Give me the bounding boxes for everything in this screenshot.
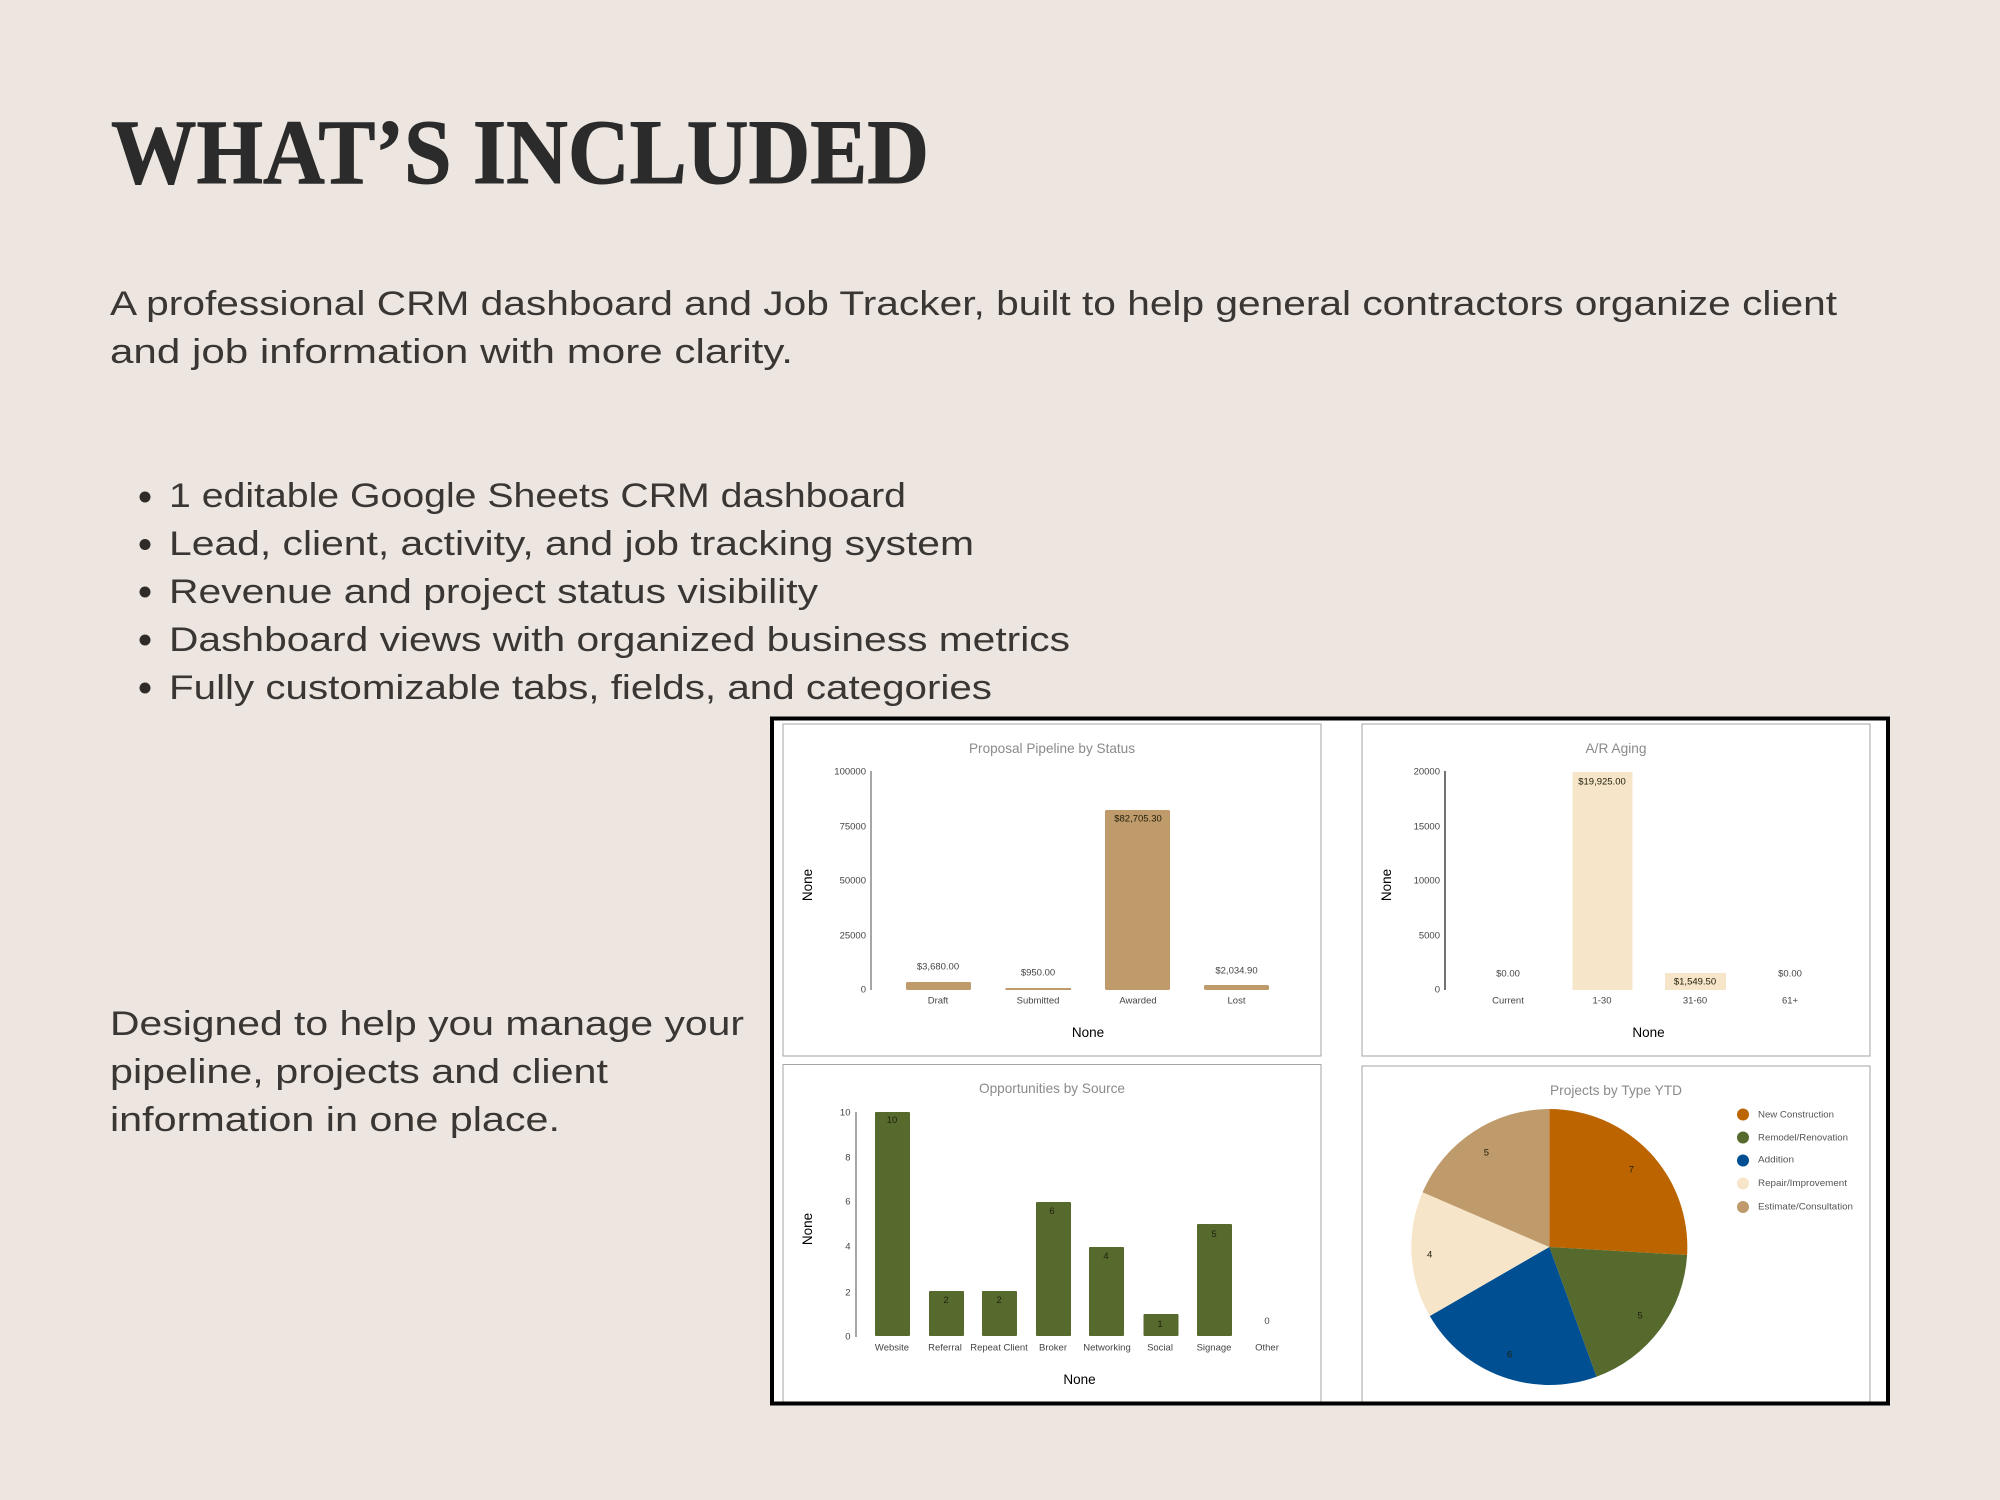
bullet list: Revenue and project status visibility [169,573,818,611]
panel: A/R aging: $19,925.00 [1578,776,1626,788]
panel: opportunities by source: Social [1147,1342,1173,1354]
panel: proposal pipeline by status: $950.00 [1021,968,1055,978]
panel: A/R aging: $0.00 [1778,968,1802,980]
panel: A/R aging: 61+ [1782,996,1799,1006]
panel: opportunities by source: 0 [1264,1316,1270,1327]
panel: A/R aging: 1-30 [1592,996,1612,1006]
bullet list: Dashboard views with organized business metrics [169,621,1070,659]
panel: proposal pipeline by status: 0 [861,984,866,996]
panel: A/R aging: 0 [1435,984,1440,996]
panel: A/R aging: $1,549.50 [1674,976,1716,988]
side text block: Designed to help you manage your [110,1005,744,1043]
panel: proposal pipeline by status: 50000 [840,876,866,886]
panel: proposal pipeline by status: Draft [928,996,949,1006]
pie legend: Estimate/Consultation [1758,1202,1853,1212]
panel: opportunities by source: 6 [1049,1206,1055,1217]
panel: proposal pipeline by status: 25000 [840,930,866,942]
panel: A/R aging: $0.00 [1496,968,1520,980]
panel: A/R aging: 15000 [1414,822,1440,832]
panel: opportunities by source: 4 [845,1242,850,1252]
panel: opportunities by source: 0 [845,1332,850,1342]
panel: proposal pipeline by status: Lost [1228,996,1246,1006]
intro paragraph: and job information with more clarity. [110,333,793,371]
bullet list: 1 editable Google Sheets CRM dashboard [169,477,906,515]
intro paragraph [110,285,1838,371]
pie legend: New Construction [1758,1110,1834,1120]
panel: proposal pipeline by status: 75000 [840,822,866,832]
side text block [110,1005,744,1139]
panel: opportunities by source: 2 [996,1295,1002,1306]
panel: A/R aging: 5000 [1419,930,1440,942]
panel: A/R aging [1362,724,1870,1056]
panel: proposal pipeline by status: $82,705.30 [1114,814,1162,824]
panel: projects by type YTD [1362,1066,1870,1402]
panel: proposal pipeline by status: Awarded [1119,996,1157,1006]
panel: projects by type YTD: Projects by Type YTD [1550,1082,1682,1098]
pie chart: 7 [1629,1164,1634,1176]
panel: opportunities by source: Opportunities by Source [979,1080,1125,1096]
panel: opportunities by source: Other [1255,1342,1279,1354]
intro paragraph: A professional CRM dashboard and Job Tracker, built to help general contractors organize client [110,285,1838,323]
panel: proposal pipeline by status: Submitted [1017,996,1059,1006]
pie chart: 6 [1507,1350,1512,1360]
panel: proposal pipeline by status: 100000 [834,766,866,778]
panel: A/R aging: Current [1492,996,1524,1006]
bullet list: Fully customizable tabs, fields, and categories [169,669,992,707]
pie chart [1411,1109,1687,1385]
pie chart: 5 [1637,1310,1643,1322]
panel: opportunities by source: 4 [1103,1251,1109,1262]
panel: opportunities by source: 2 [943,1295,949,1306]
panel: proposal pipeline by status: None [1072,1025,1104,1040]
panel: proposal pipeline by status [783,724,1321,1056]
pie chart: 5 [1484,1148,1489,1158]
panel: opportunities by source: 6 [845,1196,850,1208]
panel: A/R aging: 10000 [1414,876,1440,886]
panel: opportunities by source: Broker [1039,1342,1067,1354]
panel: opportunities by source: Website [875,1342,909,1354]
side text block: information in one place. [110,1101,560,1139]
dashboard screenshot [772,718,1888,1404]
panel: opportunities by source: 2 [845,1288,850,1298]
panel: opportunities by source: Repeat Client [970,1342,1028,1354]
panel: proposal pipeline by status: Proposal Pipeline by Status [969,740,1135,756]
panel: opportunities by source: Referral [928,1342,962,1354]
panel: proposal pipeline by status: $2,034.90 [1215,966,1258,976]
panel: proposal pipeline by status: $3,680.00 [917,962,959,972]
panel: A/R aging: 31-60 [1683,996,1707,1006]
title: WHAT’S INCLUDED [111,101,929,203]
pie legend: Repair/Improvement [1758,1178,1847,1189]
pie chart: 4 [1427,1250,1432,1260]
panel: opportunities by source: None [1063,1372,1096,1387]
pie legend: Addition [1758,1154,1794,1166]
pie legend: Remodel/Renovation [1758,1132,1848,1144]
panel: opportunities by source: None [800,1213,815,1245]
bullet list [140,477,1070,707]
panel: proposal pipeline by status: None [800,869,815,901]
panel: opportunities by source: Networking [1083,1342,1131,1354]
panel: opportunities by source: 5 [1211,1229,1217,1240]
panel: opportunities by source: 10 [887,1115,897,1126]
panel: opportunities by source: 1 [1157,1319,1163,1330]
bullet list: Lead, client, activity, and job tracking system [169,525,974,563]
panel: opportunities by source: 10 [840,1108,850,1118]
panel: A/R aging: A/R Aging [1586,740,1646,756]
side text block: pipeline, projects and client [110,1053,609,1091]
panel: opportunities by source [783,1064,1321,1402]
panel: opportunities by source: Signage [1197,1342,1231,1354]
panel: opportunities by source: 8 [845,1152,850,1164]
panel: A/R aging: None [1632,1025,1665,1040]
pie legend [1737,1108,1853,1213]
panel: A/R aging: 20000 [1414,766,1440,778]
panel: A/R aging: None [1379,869,1394,901]
